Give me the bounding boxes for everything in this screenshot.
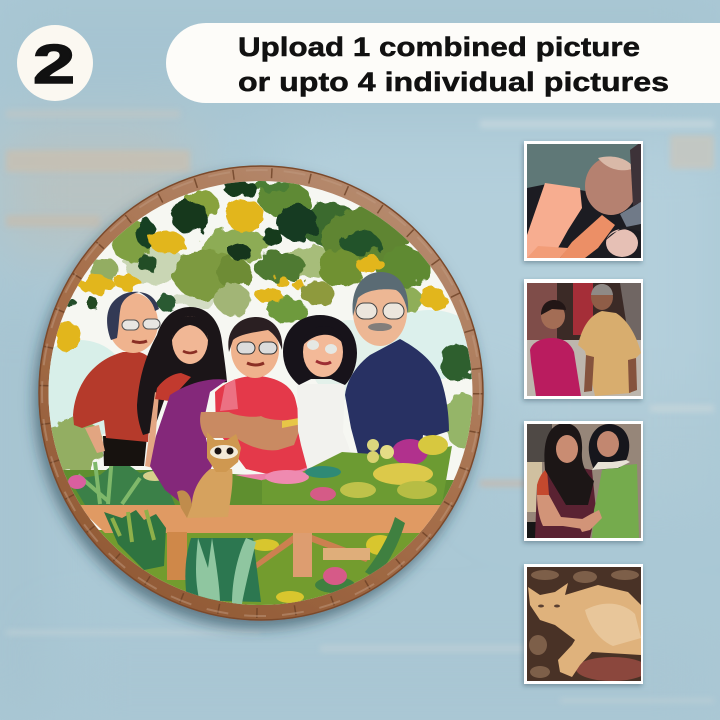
round wood slice portrait	[30, 166, 483, 620]
photo 1: man in orange vest selfie	[524, 141, 643, 261]
heading banner: or upto 4 individual pictures	[238, 67, 669, 97]
heading banner: Upload 1 combined picture	[238, 32, 640, 62]
lower yellow flowers	[251, 535, 394, 603]
bark rim	[39, 166, 483, 620]
figure: older man in navy shirt	[345, 272, 449, 461]
photo 2: couple standing	[524, 279, 643, 399]
cat	[177, 432, 241, 518]
garden bed	[50, 470, 470, 510]
figure: girl in white dress	[283, 315, 357, 477]
heading banner	[166, 23, 720, 103]
step number badge	[17, 25, 93, 101]
figure: woman in purple saree	[137, 307, 227, 510]
foliage	[47, 180, 480, 473]
step number badge: 2	[33, 33, 75, 95]
painted scene	[48, 181, 472, 605]
bench	[76, 505, 445, 580]
flowers on bed	[262, 435, 452, 504]
lower plants	[185, 538, 261, 602]
photo 4: ginger cat	[524, 564, 648, 684]
yellow blossoms	[55, 200, 446, 353]
plants on bed	[76, 466, 175, 505]
figure: man in red shirt	[73, 292, 160, 466]
figure: woman in pink-red saree	[200, 317, 308, 481]
photo 3: two women	[524, 421, 643, 541]
